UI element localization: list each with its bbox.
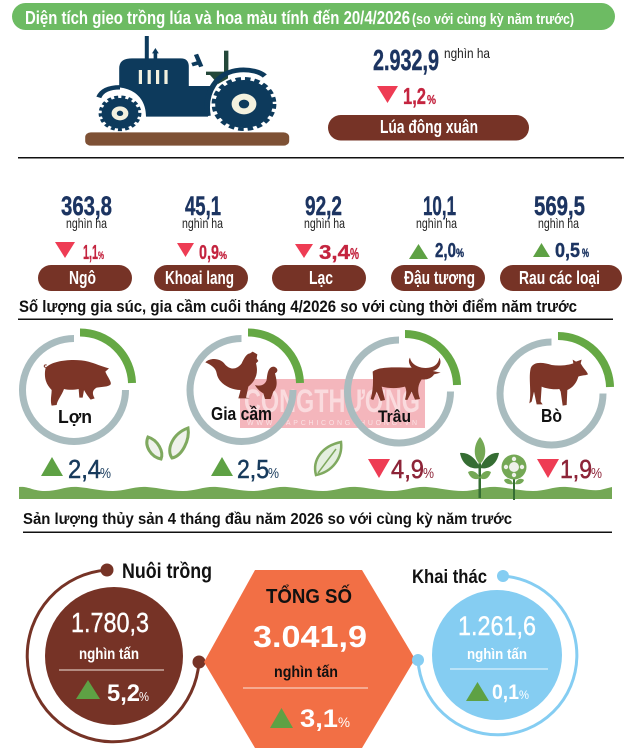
stat: Đậu tương: 10,1 bbox=[423, 191, 456, 221]
icon: sprout bbox=[460, 437, 499, 498]
stat: Khoai lang: % bbox=[219, 250, 227, 262]
icon: flower bbox=[502, 454, 526, 500]
panel: Gia cầm: Gia cầm bbox=[211, 404, 272, 424]
stat: Lạc bbox=[272, 191, 366, 291]
panel: Tổng số: 3,1 bbox=[300, 705, 338, 733]
panel: Tổng số: 3.041,9 bbox=[253, 619, 367, 654]
panel: Bò bbox=[500, 336, 610, 484]
panel: Khai thác: 1.261,6 bbox=[458, 611, 536, 641]
panel: Gia cầm bbox=[190, 332, 300, 484]
stat: Ngô: nghìn ha bbox=[66, 215, 107, 231]
stat: Rau các loại: % bbox=[582, 246, 589, 260]
heading: crop area: Diện tích gieo trồng lúa và hoa màu tính đến 20/4/2026 bbox=[25, 8, 410, 28]
stat: Đậu tương: % bbox=[456, 246, 464, 260]
stat: Rau các loại: 569,5 bbox=[534, 191, 585, 221]
panel: Trâu bbox=[348, 334, 457, 484]
panel: Tổng số: % bbox=[338, 714, 350, 730]
stat: Rau các loại: nghìn ha bbox=[538, 215, 579, 231]
panel: Tổng số: TỔNG SỐ bbox=[266, 584, 352, 608]
panel: Nuôi trồng: 1.780,3 bbox=[71, 607, 149, 638]
panel: Nuôi trồng: Nuôi trồng bbox=[122, 560, 212, 583]
stat: Lúa đông xuân bbox=[328, 45, 529, 140]
icon: rooster and duck bbox=[205, 352, 277, 399]
icon: two leaves bbox=[147, 428, 188, 459]
panel: Nuôi trồng: % bbox=[139, 689, 149, 704]
panel: Trâu: Trâu bbox=[378, 407, 411, 426]
panel: Khai thác: Khai thác bbox=[412, 567, 487, 588]
stat: Lạc: 3,4 bbox=[319, 242, 351, 264]
stat: Ngô: Ngô bbox=[69, 268, 96, 288]
stat: Lạc: Lạc bbox=[309, 268, 333, 288]
stat: Lạc: % bbox=[350, 246, 359, 263]
panel: Tổng số bbox=[204, 570, 415, 748]
watermark bbox=[240, 379, 425, 428]
stat: Đậu tương: nghìn ha bbox=[416, 215, 457, 231]
stat: Khoai lang: 0,9 bbox=[199, 242, 219, 264]
stat: Lúa đông xuân: % bbox=[427, 92, 436, 107]
stat: Khoai lang: Khoai lang bbox=[165, 268, 234, 288]
panel: Khai thác: 0,1 bbox=[492, 681, 519, 704]
panel: Gia cầm: 2,5 bbox=[237, 454, 269, 484]
panel: Nuôi trồng: nghìn tấn bbox=[79, 646, 139, 663]
stat: Lúa đông xuân: nghìn ha bbox=[444, 45, 490, 61]
panel: Bò: % bbox=[591, 465, 602, 482]
panel: Nuôi trồng: 5,2 bbox=[107, 680, 140, 707]
panel: Lợn: % bbox=[100, 465, 111, 482]
stat: Lúa đông xuân: 1,2 bbox=[403, 83, 426, 109]
stat: Khoai lang: nghìn ha bbox=[182, 215, 223, 231]
panel: Lợn: 2,4 bbox=[68, 454, 101, 484]
heading: crop area bbox=[12, 3, 615, 30]
stat: Đậu tương: 2,0 bbox=[435, 240, 456, 262]
panel: Khai thác: nghìn tấn bbox=[467, 646, 527, 663]
heading: fisheries: Sản lượng thủy sản 4 tháng đầu năm 2026 so với cùng kỳ năm trước bbox=[23, 511, 512, 528]
stat: Rau các loại: 0,5 bbox=[555, 240, 580, 262]
stat: Lúa đông xuân: Lúa đông xuân bbox=[380, 117, 478, 137]
panel: Trâu: % bbox=[423, 465, 434, 482]
stat: Đậu tương bbox=[391, 191, 485, 291]
panel: Trâu: 4,9 bbox=[391, 454, 424, 484]
icon: pig bbox=[44, 360, 111, 406]
panel: Bò: 1,9 bbox=[560, 454, 592, 484]
wave ground strip bbox=[19, 487, 612, 499]
stat: Lạc: nghìn ha bbox=[304, 215, 345, 231]
stat: Khoai lang: 45,1 bbox=[185, 191, 221, 221]
panel: Lợn bbox=[23, 332, 132, 484]
stat: Đậu tương: Đậu tương bbox=[404, 268, 475, 288]
stat: Lúa đông xuân: 2.932,9 bbox=[373, 45, 439, 77]
stat: Ngô: 1,1 bbox=[83, 242, 98, 264]
stat: Lạc: 92,2 bbox=[305, 191, 342, 221]
panel: Khai thác: % bbox=[519, 688, 529, 702]
panel: Khai thác bbox=[412, 567, 577, 735]
stat: Rau các loại: Rau các loại bbox=[519, 268, 600, 288]
panel: Gia cầm: % bbox=[268, 465, 279, 482]
stat: Ngô: 363,8 bbox=[61, 191, 112, 221]
panel: Nuôi trồng bbox=[27, 560, 212, 742]
stat: Rau các loại bbox=[500, 191, 622, 291]
stat: Ngô bbox=[38, 191, 132, 291]
heading: crop area: (so với cùng kỳ năm trước) bbox=[412, 11, 574, 28]
icon: buffalo bbox=[371, 358, 441, 401]
watermark: CÔNGTHƯƠNG bbox=[244, 383, 420, 419]
watermark: WWW.TAPCHICONGTHUONG.VN bbox=[247, 420, 417, 427]
panel: Lợn: Lợn bbox=[58, 407, 92, 427]
icon: single leaf bbox=[315, 442, 341, 475]
icon: tractor bbox=[85, 36, 289, 146]
stat: Khoai lang bbox=[154, 191, 248, 291]
icon: cow bbox=[529, 360, 588, 406]
stat: Ngô: % bbox=[98, 250, 104, 262]
panel: Tổng số: nghìn tấn bbox=[274, 664, 338, 681]
panel: Bò: Bò bbox=[541, 406, 562, 426]
